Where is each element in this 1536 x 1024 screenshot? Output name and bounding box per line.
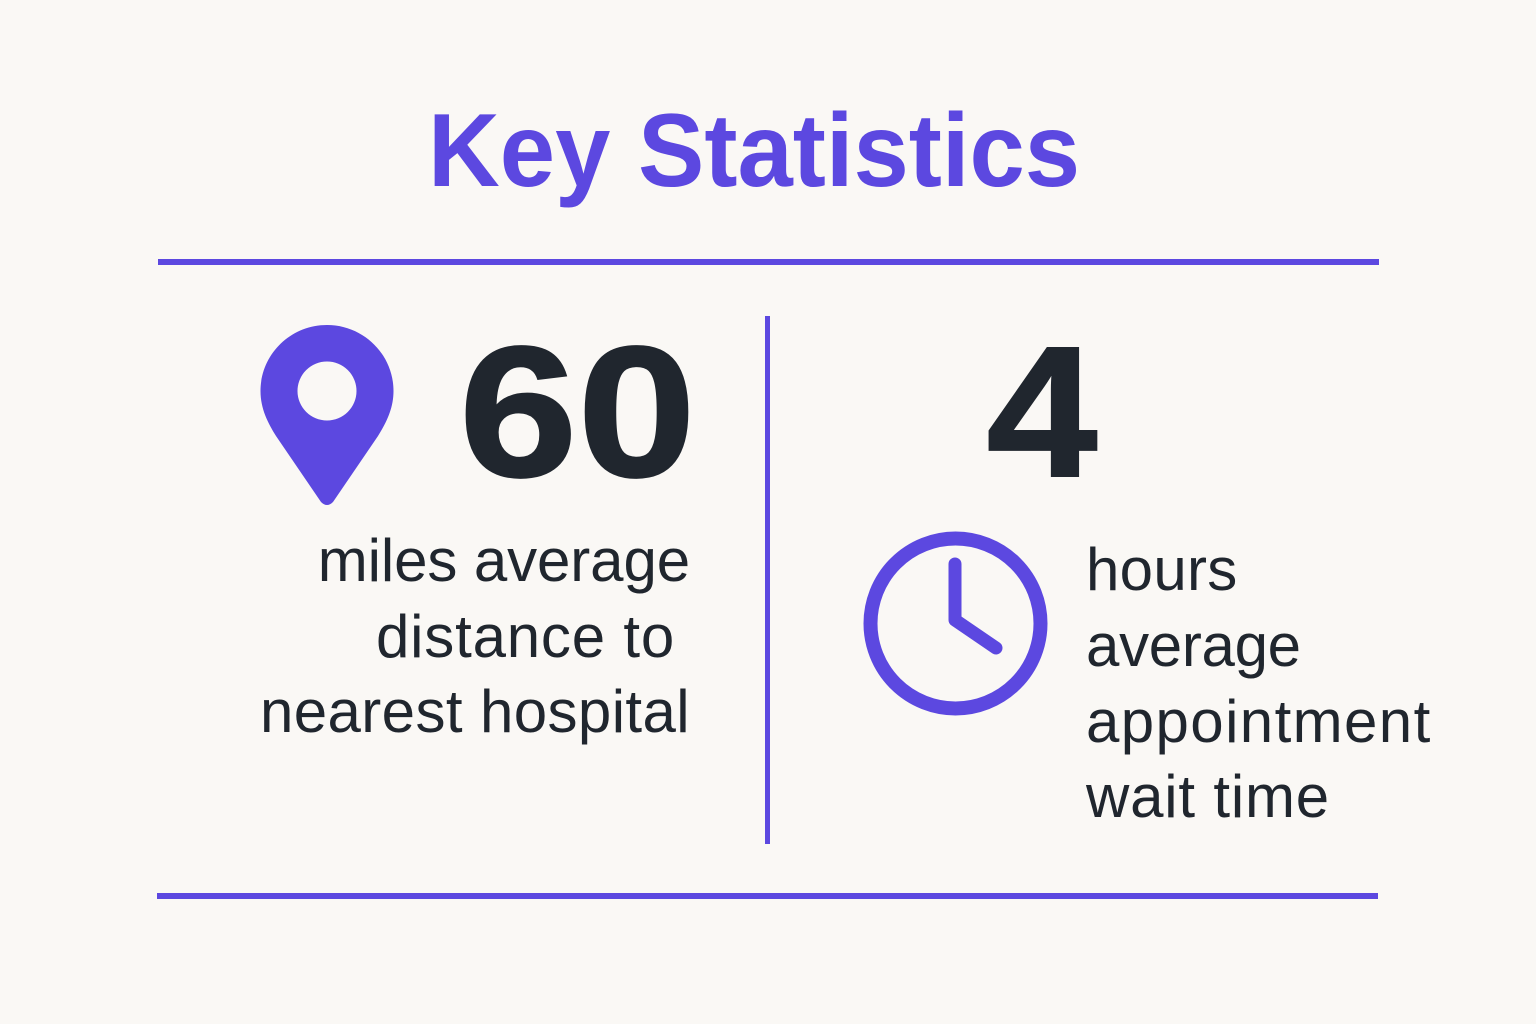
icon: clock [864,532,1048,716]
description: wait time: average [1086,612,1301,679]
panel: distance [260,309,696,745]
description: wait time: appointment [1086,688,1432,755]
bottom rule [157,893,1378,899]
icon: location pin [260,325,394,505]
top rule [158,259,1379,265]
description: distance [260,527,690,745]
title: Key Statistics [428,93,1080,209]
panel: wait time [864,309,1432,830]
description: distance: nearest hospital [260,678,690,745]
statistic: 60: 60 [459,309,696,516]
description: distance: distance to [376,602,675,670]
description: wait time [1086,536,1432,830]
description: wait time: wait time [1086,763,1330,830]
description: distance: miles average [318,527,690,594]
description: wait time: hours [1086,536,1238,603]
vertical divider [765,316,770,844]
statistic: 4: 4 [987,309,1097,516]
